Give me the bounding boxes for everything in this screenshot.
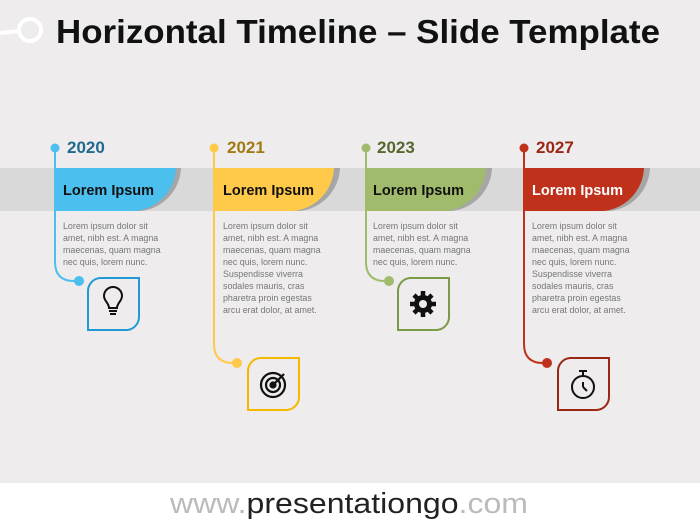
- panel: 2021: Lorem ipsum dolor sit: [223, 221, 308, 231]
- panel: 2020: Lorem Ipsum: [63, 183, 154, 199]
- title: Horizontal Timeline – Slide Template: [56, 13, 660, 50]
- panel: 2021: nec quis, lorem nunc.: [223, 257, 307, 267]
- panel: 2023: Lorem ipsum dolor sit: [373, 221, 458, 231]
- panel: 2021: maecenas, quam magna: [223, 245, 321, 255]
- panel: 2021: sodales mauris, cras: [223, 281, 305, 291]
- panel: 2023: 2023: [377, 138, 415, 157]
- panel: 2027: sodales mauris, cras: [532, 281, 614, 291]
- panel: 2023: Lorem Ipsum: [373, 183, 464, 199]
- footer: www. presentationgo .com: [169, 488, 528, 520]
- icon: title decoration: [0, 19, 41, 41]
- panel: 2027: pharetra proin egestas: [532, 293, 621, 303]
- panel: 2027: nec quis, lorem nunc.: [532, 257, 616, 267]
- panel: 2020: maecenas, quam magna: [63, 245, 161, 255]
- panel: 2021: amet, nibh est. A magna: [223, 233, 318, 243]
- panel: 2023: amet, nibh est. A magna: [373, 233, 468, 243]
- panel: 2020: [50, 138, 181, 330]
- panel: 2021: arcu erat dolor, at amet.: [223, 305, 317, 315]
- footer: [0, 483, 700, 525]
- panel: 2020: nec quis, lorem nunc.: [63, 257, 147, 267]
- panel: 2021: Lorem Ipsum: [223, 183, 314, 199]
- panel: 2027: amet, nibh est. A magna: [532, 233, 627, 243]
- panel: 2027: Suspendisse viverra: [532, 269, 612, 279]
- panel: 2027: maecenas, quam magna: [532, 245, 630, 255]
- panel: 2021: Suspendisse viverra: [223, 269, 303, 279]
- panel: 2021: pharetra proin egestas: [223, 293, 312, 303]
- panel: 2023: nec quis, lorem nunc.: [373, 257, 457, 267]
- panel: 2027: Lorem ipsum dolor sit: [532, 221, 617, 231]
- panel: 2020: Lorem ipsum dolor sit: [63, 221, 148, 231]
- panel: 2021: 2021: [227, 138, 265, 157]
- panel: 2021: [210, 138, 340, 410]
- gray band: [0, 168, 700, 211]
- panel: 2027: [520, 138, 650, 410]
- panel: 2023: maecenas, quam magna: [373, 245, 471, 255]
- panel: 2023: [362, 138, 492, 330]
- panel: 2020: amet, nibh est. A magna: [63, 233, 158, 243]
- panel: 2027: arcu erat dolor, at amet.: [532, 305, 626, 315]
- panel: 2027: 2027: [536, 138, 574, 157]
- panel: 2020: 2020: [67, 138, 105, 157]
- panel: 2027: Lorem Ipsum: [532, 183, 623, 199]
